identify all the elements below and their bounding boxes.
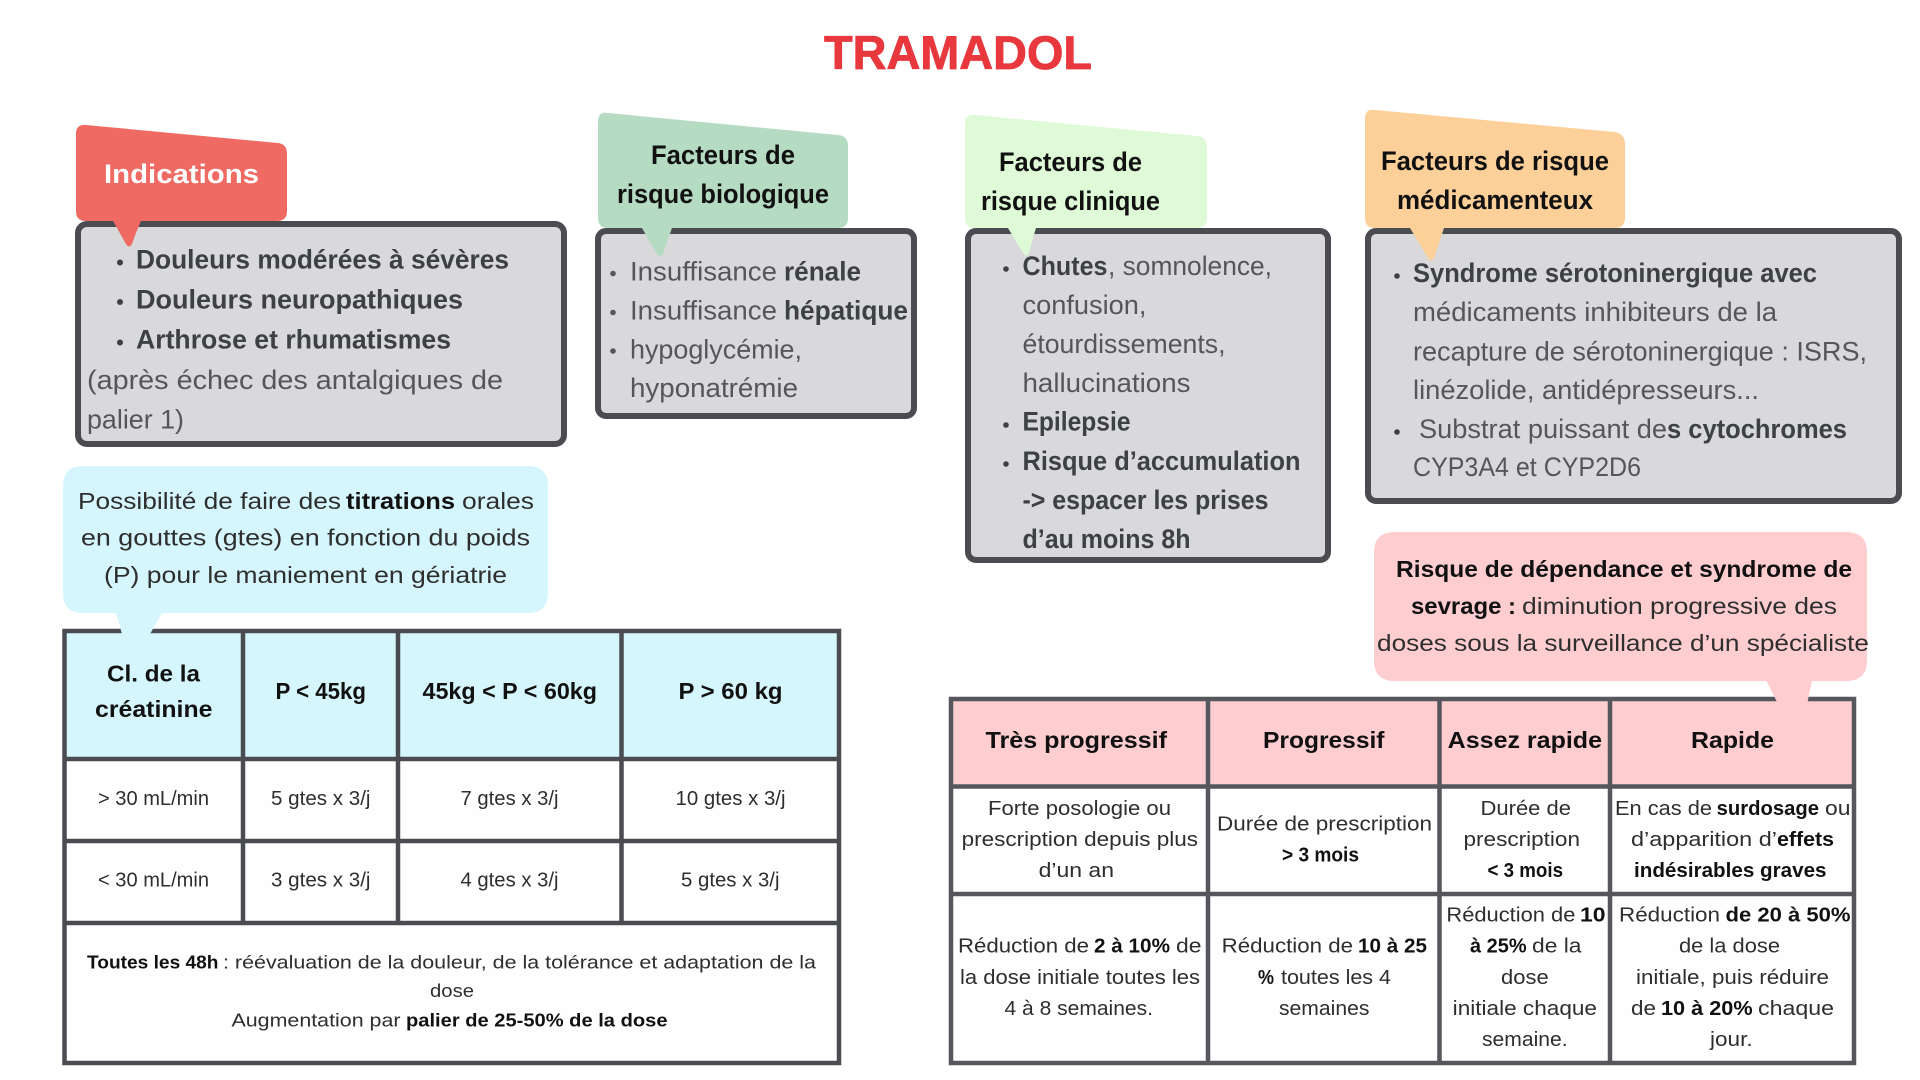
- sevrage table reductions row: initiale, puis réduire: [1636, 966, 1829, 989]
- callout: titrations: (P) pour le maniement en gériatrie: [104, 562, 507, 588]
- sevrage table header labels: Progressif: [1263, 727, 1385, 753]
- indications list: palier 1): [87, 404, 184, 434]
- sevrage table reductions row: 10: [1580, 904, 1606, 926]
- sevrage table reductions row: de la dose: [1679, 934, 1780, 958]
- titration table footnote: dose: [430, 980, 474, 1001]
- sevrage table conditions row: prescription depuis plus: [962, 828, 1198, 851]
- heading: biological risk: risque biologique: [617, 179, 829, 209]
- indications box: [78, 224, 564, 444]
- indications list: [87, 244, 509, 434]
- sevrage table header labels: Rapide: [1691, 727, 1774, 753]
- title: TRAMADOL: [824, 26, 1092, 79]
- indications list: Arthrose et rhumatismes: [136, 324, 451, 354]
- sevrage table conditions row: ou: [1825, 797, 1850, 820]
- sevrage table header fill: [951, 699, 1854, 787]
- callout: dépendance et sevrage: Risque de dépendance et syndrome de: [1396, 556, 1852, 582]
- sevrage table reductions row: de: [1631, 997, 1656, 1020]
- titration table header labels: P < 45kg: [276, 678, 366, 704]
- callout: titrations: Possibilité de faire des: [78, 488, 341, 514]
- heading: indications: Indications: [104, 159, 259, 189]
- clinical risk list: Risque d’accumulation: [1022, 446, 1300, 476]
- panel: facteurs de risque biologique: [598, 113, 914, 416]
- indications list: Douleurs modérées à sévères: [136, 244, 509, 274]
- titration table doses: [98, 787, 786, 892]
- sevrage table conditions row: Forte posologie ou: [988, 797, 1171, 820]
- heading: clinical risk: [965, 115, 1207, 256]
- titration table doses: 5 gtes x 3/j: [681, 868, 780, 892]
- titration table grid: [64, 631, 839, 1063]
- titration table doses: 10 gtes x 3/j: [676, 787, 786, 810]
- sevrage table reductions row: semaines: [1279, 997, 1369, 1020]
- sevrage table reductions row: de 20 à 50%: [1726, 904, 1850, 926]
- sevrage table reductions row: chaque: [1758, 997, 1834, 1020]
- sevrage table reductions row: Réduction: [1619, 904, 1720, 926]
- titration table header fill: [64, 631, 839, 759]
- sevrage table reductions row: [958, 904, 1850, 1051]
- sevrage table reductions row: initiale chaque: [1453, 997, 1597, 1020]
- drug risk list: CYP3A4 et CYP2D6: [1413, 452, 1641, 482]
- indications list: Douleurs neuropathiques: [136, 284, 463, 314]
- heading: drug risk: Facteurs de risque: [1381, 146, 1609, 176]
- sevrage table conditions row: d’apparition d’: [1631, 828, 1777, 851]
- heading: clinical risk: Facteurs de: [999, 147, 1142, 177]
- table: titration: [64, 631, 839, 1063]
- sevrage table conditions row: En cas de: [1615, 797, 1712, 820]
- callout: titrations: orales: [462, 488, 534, 514]
- clinical risk list: étourdissements,: [1022, 329, 1226, 359]
- heading: biological risk: [598, 113, 848, 256]
- sevrage table conditions row: surdosage: [1717, 797, 1819, 820]
- biological risk list: Insuffisance: [630, 256, 777, 286]
- biological risk box: [598, 231, 914, 416]
- sevrage table conditions row: prescription: [1464, 828, 1580, 851]
- sevrage table conditions row: > 3 mois: [1282, 844, 1359, 866]
- callout: dépendance et sevrage: doses sous la surveillance d’un spécialiste: [1377, 630, 1869, 656]
- callout: titrations: titrations: [346, 488, 455, 514]
- sevrage table reductions row: Réduction de: [958, 934, 1089, 958]
- callout: titrations: [63, 466, 548, 634]
- sevrage table conditions row: indésirables graves: [1634, 859, 1826, 882]
- sevrage table header labels: [986, 727, 1774, 753]
- sevrage table body fill: [951, 787, 1854, 1063]
- clinical risk box: [968, 231, 1328, 560]
- sevrage table header labels: Assez rapide: [1448, 727, 1602, 753]
- sevrage table reductions row: la dose initiale toutes les: [960, 966, 1200, 989]
- sevrage table header labels: Très progressif: [986, 727, 1167, 753]
- sevrage table reductions row: Réduction de: [1222, 934, 1353, 958]
- sevrage table conditions row: Durée de: [1480, 797, 1571, 820]
- titration table header labels: Cl. de la: [107, 660, 201, 686]
- heading: drug risk: [1365, 110, 1625, 260]
- drug risk list: Syndrome sérotoninergique avec: [1413, 258, 1817, 288]
- callout: dépendance et sevrage: diminution progressive des: [1522, 593, 1837, 619]
- sevrage table grid: [951, 699, 1854, 1063]
- biological risk list: Insuffisance: [630, 296, 777, 326]
- sevrage table reductions row: 10 à 20%: [1661, 997, 1753, 1020]
- sevrage table reductions row: de la: [1532, 934, 1582, 958]
- titration table header labels: P > 60 kg: [678, 678, 782, 704]
- drug risk box: [1368, 231, 1899, 501]
- sevrage table reductions row: dose: [1501, 966, 1549, 989]
- callout: titrations: en gouttes (gtes) en fonction du poids: [81, 524, 530, 550]
- drug risk list: médicaments inhibiteurs de la: [1413, 297, 1778, 327]
- drug risk list: Substrat puissant de: [1419, 414, 1667, 444]
- sevrage table reductions row: 10 à 25: [1358, 934, 1427, 958]
- sevrage table conditions row: d’un an: [1039, 859, 1114, 882]
- clinical risk list: [1003, 251, 1300, 554]
- titration table doses: 3 gtes x 3/j: [271, 868, 370, 892]
- panel: facteurs de risque clinique: [965, 115, 1328, 560]
- titration table body fill: [64, 759, 839, 1063]
- heading: biological risk: Facteurs de: [651, 140, 795, 170]
- sevrage table conditions row: Durée de prescription: [1217, 812, 1432, 836]
- titration table footnote: Toutes les 48h: [87, 952, 218, 972]
- drug risk list: recapture de sérotoninergique : ISRS,: [1413, 336, 1867, 366]
- sevrage table reductions row: 2 à 10%: [1094, 934, 1170, 958]
- biological risk list: hyponatrémie: [630, 373, 798, 403]
- sevrage table conditions row: < 3 mois: [1488, 859, 1563, 882]
- biological risk list: hypoglycémie,: [630, 334, 802, 364]
- titration table doses: 4 gtes x 3/j: [460, 868, 558, 892]
- indications list: (après échec des antalgiques de: [87, 365, 503, 395]
- sevrage table conditions row: effets: [1777, 828, 1834, 851]
- titration table footnote: Augmentation par: [232, 1010, 400, 1030]
- clinical risk list: hallucinations: [1022, 368, 1190, 398]
- clinical risk list: , somnolence,: [1108, 251, 1272, 281]
- sevrage table reductions row: jour.: [1709, 1028, 1753, 1051]
- sevrage table reductions row: de: [1176, 934, 1202, 958]
- clinical risk list: -> espacer les prises: [1022, 485, 1268, 515]
- titration table footnote: : réévaluation de la douleur, de la tolérance et adaptation de la: [223, 952, 817, 972]
- clinical risk list: Epilepsie: [1022, 406, 1130, 436]
- heading: indications: [76, 125, 287, 246]
- sevrage table reductions row: à 25%: [1470, 934, 1527, 958]
- titration table doses: < 30 mL/min: [98, 868, 209, 892]
- panel: indications: [76, 125, 564, 444]
- drug risk list: [1394, 258, 1867, 482]
- titration table header labels: 45kg < P < 60kg: [422, 678, 597, 704]
- clinical risk list: Chutes: [1022, 251, 1108, 281]
- titration table doses: 7 gtes x 3/j: [460, 787, 558, 810]
- sevrage table conditions row: [962, 797, 1850, 882]
- table: sevrage: [951, 699, 1854, 1063]
- biological risk list: hépatique: [784, 296, 908, 326]
- drug risk list: linézolide, antidépresseurs...: [1413, 375, 1759, 405]
- biological risk list: rénale: [784, 256, 861, 286]
- sevrage table reductions row: %: [1258, 966, 1274, 989]
- panel: facteurs de risque médicamenteux: [1365, 110, 1899, 501]
- clinical risk list: confusion,: [1022, 290, 1146, 320]
- titration table footnote: palier de 25-50% de la dose: [406, 1010, 668, 1030]
- heading: clinical risk: risque clinique: [981, 186, 1160, 216]
- callout: dépendance et sevrage: sevrage :: [1411, 593, 1516, 619]
- titration table doses: > 30 mL/min: [98, 787, 209, 810]
- titration table header labels: [95, 660, 782, 722]
- heading: drug risk: médicamenteux: [1397, 185, 1593, 215]
- drug risk list: s cytochromes: [1667, 414, 1847, 444]
- titration table footnote: [87, 952, 817, 1030]
- sevrage table reductions row: Réduction de: [1446, 904, 1575, 926]
- sevrage table reductions row: toutes les 4: [1281, 966, 1391, 989]
- sevrage table reductions row: semaine.: [1482, 1028, 1568, 1051]
- titration table doses: 5 gtes x 3/j: [271, 787, 370, 810]
- sevrage table reductions row: 4 à 8 semaines.: [1004, 997, 1153, 1020]
- callout: dépendance et sevrage: [1374, 532, 1869, 702]
- clinical risk list: d’au moins 8h: [1022, 524, 1190, 554]
- titration table header labels: créatinine: [95, 696, 212, 722]
- biological risk list: [610, 256, 908, 403]
